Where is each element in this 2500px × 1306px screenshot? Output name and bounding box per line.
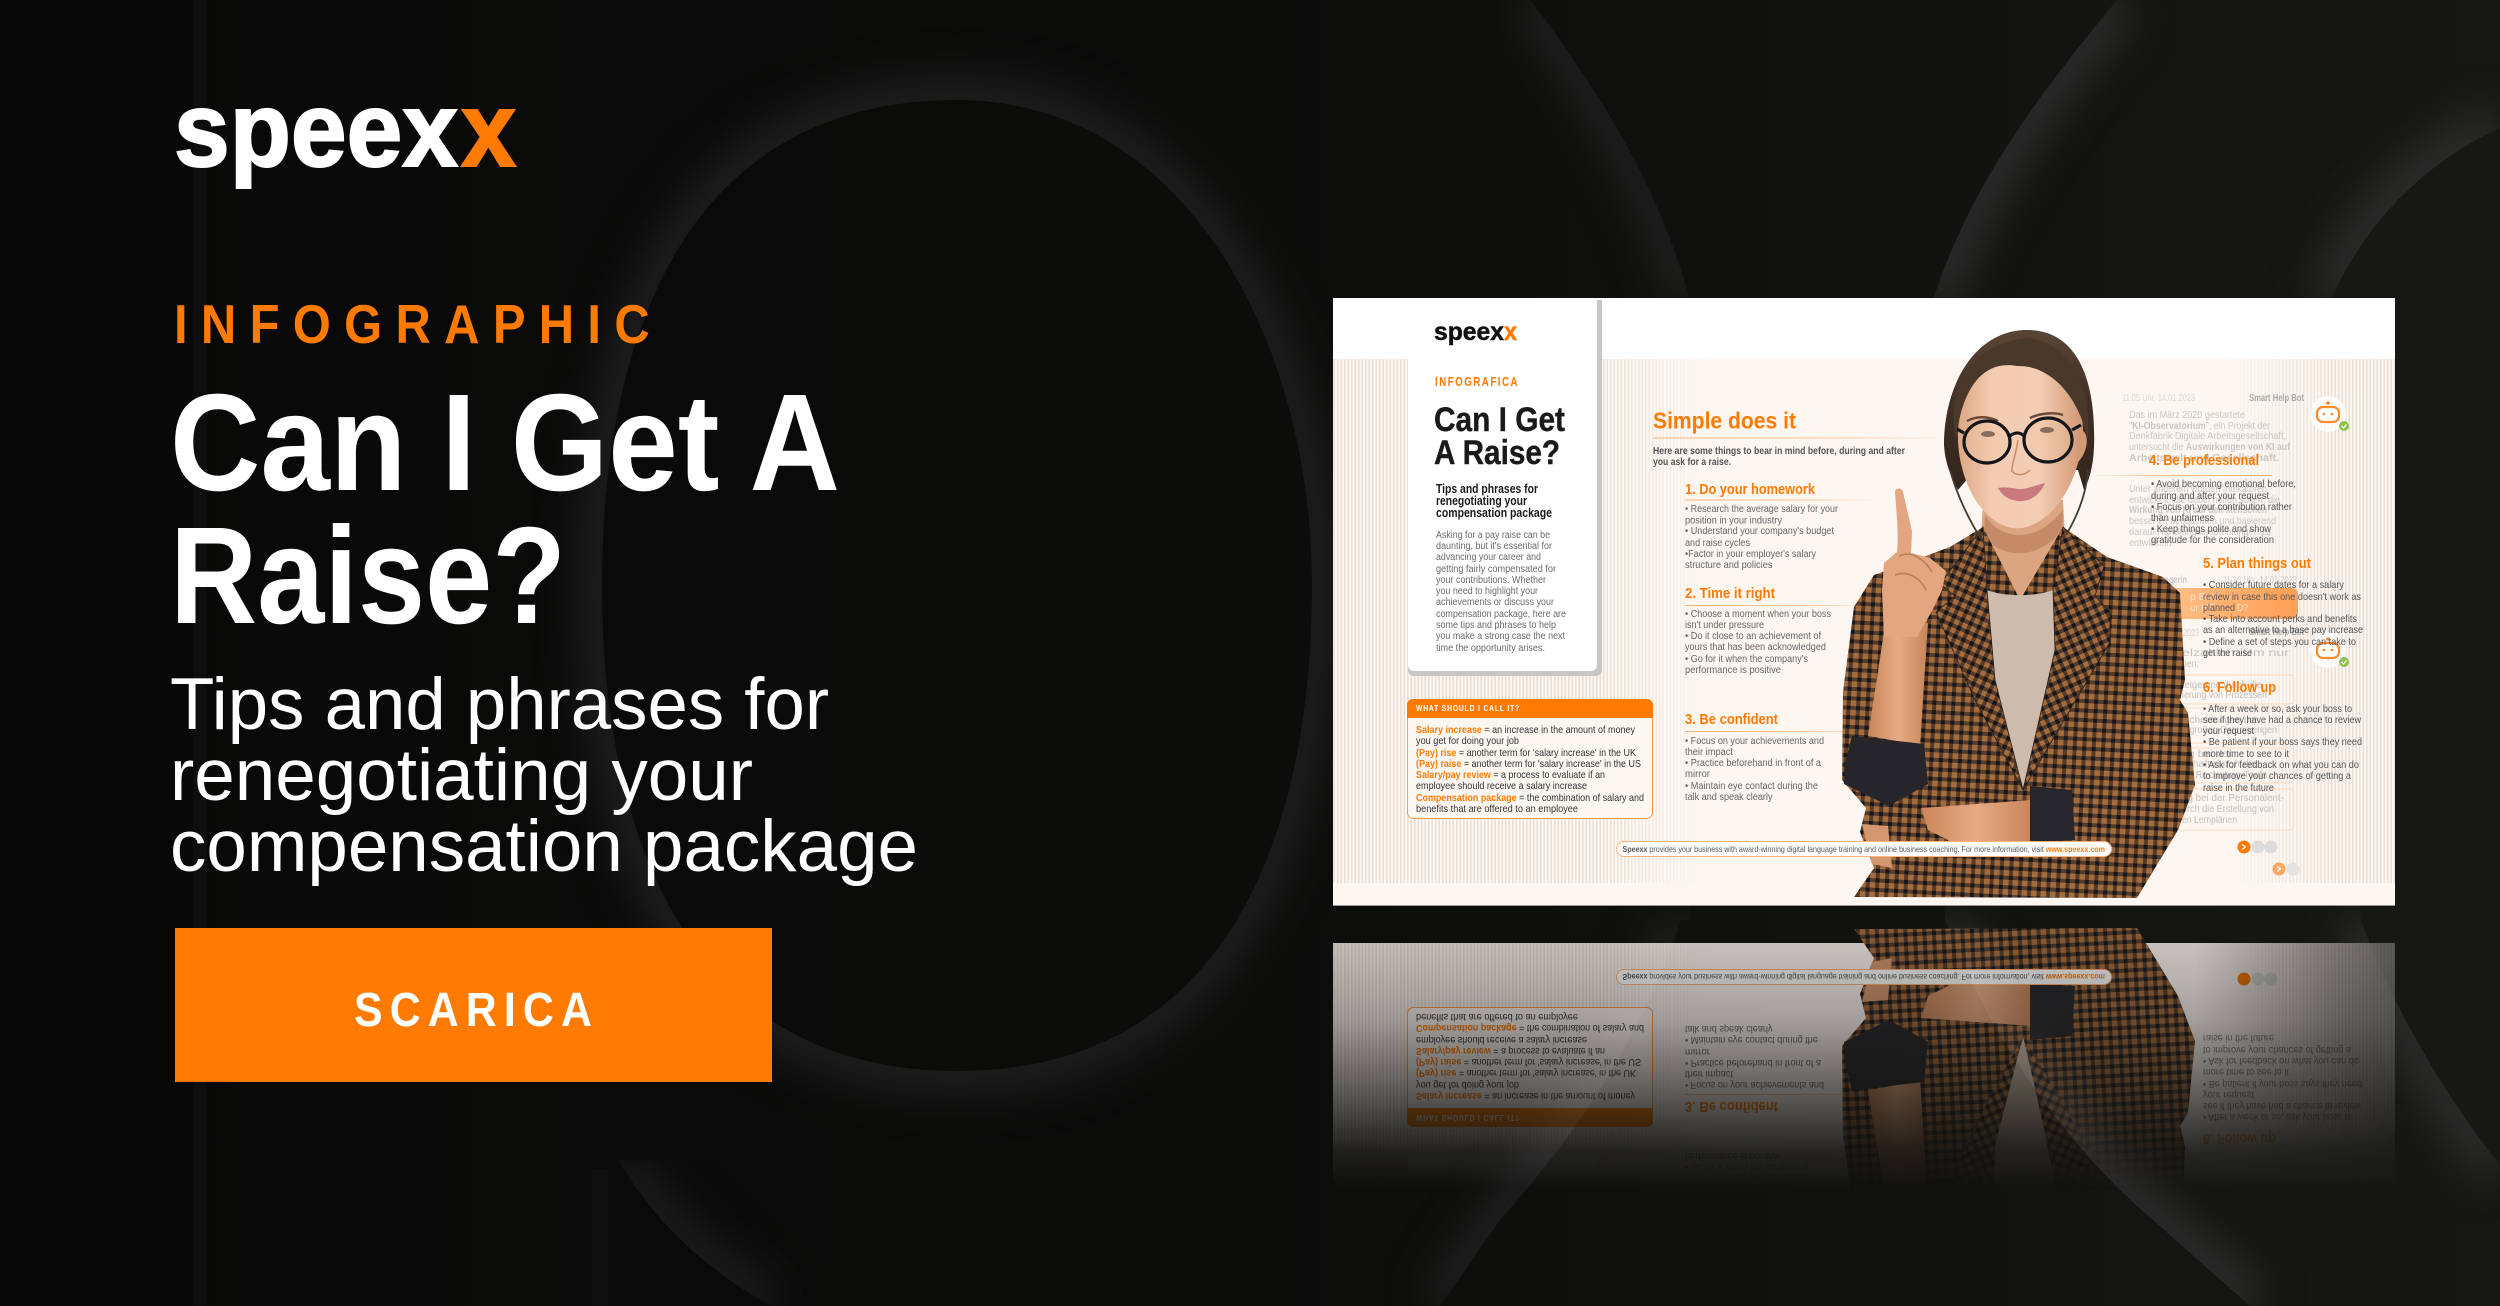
left cuff [1844,736,1928,806]
tip 5: plan things out: review in case this one doesn't work as [2203,592,2361,603]
ghosted chatbot layer: untersucht die Auswirkungen von KI auf [2129,442,2290,453]
ghosted chatbot layer: entwickeln. [2129,538,2174,549]
tip 6: follow up: your request [2203,726,2254,737]
glossary box: what should I call it: you get for doing your job [1416,736,1519,747]
reflected tip 6: see if they have had a chance to review [2203,1100,2361,1111]
reflected glossary box: Compensation package = the combination of salary and [1416,1022,1644,1033]
card intro paragraph: you make a strong case the next [1436,631,1565,642]
card subtitle: compensation package [1436,506,1552,520]
ghosted chatbot layer: p Bot [2190,592,2214,603]
tip 4: be professional: gratitude for the consideration [2151,535,2274,546]
card title: Can I Get [1434,401,1565,439]
tip 4: be professional: than unfairness [2151,513,2214,524]
ghosted chatbot layer: 11:05 Uhr, 14.01.2023 [2122,393,2195,404]
tip 4: be professional: • Keep things polite and show [2151,524,2271,535]
ghosted chatbot layer: 11:10 Uhr, 14.01.2023 [2223,575,2297,586]
ghosted chatbot layer: nen: [2182,659,2199,670]
tip 4: be professional: 4. Be professional [2149,452,2259,469]
reflected tip 6 [2203,1032,2362,1147]
glossary box: what should I call it: Salary increase = an increase in the amount of money [1416,725,1636,736]
ghosted chatbot layer: Arbeitswelt und Gesellschaft. [2129,453,2279,464]
tip 2: time it right: • Choose a moment when your boss [1685,609,1831,620]
neck [1960,500,2085,600]
main title: Raise? [170,499,566,653]
subtitle: renegotiating your [170,735,753,816]
tip 1: do your homework: structure and policies [1685,560,1772,571]
tip 5: plan things out: • Consider future dates for a salary [2203,580,2345,591]
left lapel [1936,527,2023,790]
neck shadow [1984,510,2063,553]
right lapel [2023,527,2110,790]
blazer body [1842,527,2195,898]
footer pill [1616,842,2112,856]
glossary box: what should I call it: (Pay) raise = another term for 'salary increase' in the US [1416,759,1641,770]
raised forearm [1868,623,1928,745]
ghosted chatbot layer: Smart Help Bot [2249,393,2304,404]
ghosted chatbot layer: ierung von Prozessen [2182,690,2267,701]
reflected tip 6: 6. Follow up [2203,1130,2276,1147]
tip 1: do your homework: • Research the average salary for your [1685,504,1839,515]
glasses [1957,418,2081,463]
tip 3: be confident: talk and speak clearly [1685,792,1772,803]
tip 3: be confident: • Maintain eye contact during the [1685,781,1818,792]
reflected glossary box [1407,1008,1653,1127]
tip 6: follow up: 6. Follow up [2203,679,2276,696]
reflected glossary box: you get for doing your job [1416,1079,1519,1090]
tip 3: be confident: • Focus on your achievements and [1685,736,1824,747]
card subtitle: renegotiating your [1436,494,1527,508]
card title [1434,401,1565,472]
tip 6: follow up: see if they have had a chance to review [2203,715,2361,726]
face [1958,363,2083,528]
reflected tips 2 and 3: • Go for it when the company's [1685,1161,1808,1172]
tip 1: do your homework [1685,482,1875,571]
tip 1: do your homework: position in your industry [1685,516,1782,526]
ghosted chatbot layer: ur HF [2190,603,2214,614]
crossed forearm [1921,800,2032,846]
tip 5: plan things out: as an alternative to a base pay increase [2203,625,2363,636]
card subtitle: Tips and phrases for [1436,482,1538,496]
ghosted chatbot layer: en Lernplänen [2182,815,2237,826]
reflected glossary box: employee should receive a salary increase [1416,1034,1587,1045]
tip 5: plan things out: • Take into account perks and benefits [2203,614,2357,625]
right cuff [2030,786,2075,842]
subtitle: Tips and phrases for [170,664,829,745]
reflected tip 6: more time to see to it [2203,1066,2289,1077]
card intro paragraph: your contributions. Whether [1436,575,1547,586]
poster background [1333,298,2395,906]
footer pill: Speexx provides your business with award-winning digital language training and online business coaching. For more information, visit www.speexx.com [1622,844,2105,854]
card intro paragraph: some tips and phrases to help [1436,620,1556,631]
reflected tips 2 and 3: • Practice beforehand in front of a [1685,1057,1821,1068]
reflected tip 6: • Ask for feedback on what you can do [2203,1055,2359,1066]
card subtitle [1436,482,1552,520]
speexx logo: speex [174,71,458,189]
tip 6: follow up: • After a week or so, ask your boss to [2203,704,2352,715]
tip 4: be professional: during and after your request [2151,491,2269,502]
stray hair [1950,470,2088,545]
ghosted chatbot layer: Managerin [2150,575,2187,586]
ghosted chatbot layer: Smart Help Bot [2249,627,2304,638]
ghosted chatbot layer: vo Recruiting-Tools [2182,770,2267,781]
ghosted chatbot layer: "KI-Observatorium", ein Projekt der [2129,421,2270,432]
tip 2: time it right: performance is positive [1685,665,1781,676]
tip 2: time it right: isn't under pressure [1685,620,1764,631]
reflected tip 6: your request [2203,1089,2254,1100]
tip 3: be confident [1685,712,1875,803]
card intro paragraph [1436,530,1566,654]
tip 5: plan things out: • Define a set of steps you can take to [2203,637,2356,648]
card intro paragraph: time the opportunity arises. [1436,643,1545,654]
card title: A Raise? [1434,434,1560,472]
reflected tips 2 and 3: 3. Be confident [1685,1098,1778,1114]
eyes [1981,427,2054,437]
tip 5: plan things out: get the raise [2203,648,2252,659]
infographic poster preview [1333,298,2395,906]
card intro paragraph: daunting, but it's essential for [1436,541,1553,552]
eyebrows [1967,413,2063,421]
ghosted chatbot layer: ng bei der [2182,749,2233,760]
ghosted chatbot layer: n großen Datenmengen [2182,725,2277,736]
reflected footer pill [1616,970,2112,984]
ghosted chatbot layer: elzahlen. Um nur [2182,648,2290,659]
heading: simple does it: you ask for a raise. [1653,457,1731,468]
reflected tips 2 and 3: • Focus on your achievements and [1685,1079,1824,1090]
lips [1998,483,2045,501]
reflected tips 2 and 3 [1685,1024,1842,1165]
card intro paragraph: achievements or discuss your [1436,597,1555,608]
reflected glossary box: Salary/pay review = a process to evaluate if an [1416,1045,1605,1056]
tip 2: time it right: yours that has been acknowledged [1685,642,1826,653]
tip 2: time it right: • Go for it when the company's [1685,654,1808,665]
reflected tips 2 and 3: their impact [1685,1068,1733,1079]
reflected glossary box: Salary increase = an increase in the amount of money [1416,1090,1636,1101]
reflected tip 6: • Be patient if your boss says they need [2203,1078,2362,1089]
eyebrow: INFOGRAPHIC: INFOGRAPHIC [174,293,663,355]
reflected footer pill: Speexx provides your business with award-winning digital language training and online business coaching. For more information, visit www.speexx.com [1622,972,2105,982]
tip 6: follow up: more time to see to it [2203,749,2289,760]
reflected tip 6: • After a week or so, ask your boss to [2203,1111,2352,1122]
reflected glossary box: benefits that are offered to an employee [1416,1011,1578,1022]
tip 6: follow up [2203,679,2362,794]
card logo: speex [1434,318,1504,346]
tip 6: follow up: raise in the future [2203,783,2274,794]
tip 3: be confident: mirror [1685,769,1711,780]
title card [1408,298,1602,676]
glossary box: what should I call it [1407,699,1653,818]
subtitle [170,664,918,887]
reflected tips 2 and 3: • Maintain eye contact during the [1685,1034,1818,1045]
tip 1: do your homework: and raise cycles [1685,538,1750,549]
heading: simple does it: Simple does it [1653,408,1796,434]
reflected glossary box: (Pay) raise = another term for 'salary increase' in the US [1416,1056,1641,1067]
card intro paragraph: compensation package, here are [1436,609,1566,620]
ghosted chatbot layer: D? [2237,603,2248,614]
tip 2: time it right [1685,586,1875,676]
subtitle: compensation package [170,806,918,887]
tip 4: be professional [2090,452,2296,546]
reflected tip 6: raise in the future [2203,1032,2274,1043]
tip 5: plan things out: 5. Plan things out [2203,555,2311,572]
lower hand [1862,824,1892,868]
tip 1: do your homework: 1. Do your homework [1685,482,1816,498]
nose [2012,440,2030,475]
tip 6: follow up: • Be patient if your boss says they need [2203,737,2362,748]
ghosted chatbot layer: Wirkung von KI auf den Menschen [2129,505,2267,516]
ghosted chatbot layer: Denkfabrik Digitale Arbeitsgesellschaft, [2129,431,2286,442]
ear [2076,430,2087,464]
icon: chatbot 1 [2310,396,2349,432]
hand with raised finger [1882,488,1946,637]
tip 4: be professional: • Avoid becoming emotional before, [2151,479,2296,490]
tip 1: do your homework: •Factor in your employer's salary [1685,549,1816,560]
main title [170,366,840,653]
ghosted chatbot layer: besser zu beobachten und basierend [2129,516,2276,527]
reflected card base [1408,1155,1597,1186]
shirt [1987,590,2058,790]
tip 5: plan things out: planned [2203,603,2235,614]
tip 1: do your homework: • Understand your company's budget [1685,526,1834,537]
glossary box: what should I call it: benefits that are offered to an employee [1416,804,1578,815]
tip 3: be confident: 3. Be confident [1685,712,1778,728]
reflected woman [1842,928,2195,1196]
reflected tips 2 and 3: talk and speak clearly [1685,1023,1772,1034]
main title: Can I Get A [170,366,840,520]
ghosted chatbot layer: ng bei der Personalent- [2182,793,2284,804]
reflected tips 2 and 3: performance is positive [1685,1150,1781,1161]
glossary box: what should I call it: employee should receive a salary increase [1416,781,1587,792]
icon: chatbot 2 [2310,632,2349,668]
tip 6: follow up: • Ask for feedback on what you can do [2203,760,2359,771]
glossary box: what should I call it: (Pay) rise = another term for 'salary increase' in the UK [1416,748,1636,759]
tip 6: follow up: to improve your chances of getting a [2203,771,2351,782]
tip 2: time it right: • Do it close to an achievement of [1685,631,1821,642]
tip 3: be confident: • Practice beforehand in front of a [1685,758,1821,769]
card intro paragraph: Asking for a pay raise can be [1436,530,1550,541]
card intro paragraph: getting fairly compensated for [1436,564,1557,575]
ghosted chatbot layer [2122,393,2304,830]
speexx logo: x [461,71,516,189]
ghosted chatbot layer: darauf Handlungsempfehlungen zu [2129,527,2271,538]
hair back [1944,330,2094,490]
reflected background [1333,943,2395,1190]
reflected dots [2238,972,2278,986]
ghosted chatbot layer: Das im März 2020 gestartete [2129,410,2245,421]
reflected glossary box: WHAT SHOULD I CALL IT? [1416,1113,1520,1122]
tip 5: plan things out [2203,555,2363,659]
reflected tip 6: to improve your chances of getting a [2203,1044,2351,1055]
card logo: x [1504,318,1517,346]
heading: simple does it: Here are some things to bear in mind before, during and after [1653,446,1905,457]
heading: simple does it [1653,408,1945,468]
ghosted chatbot layer: teigerung durch die [2182,680,2262,691]
card intro paragraph: advancing your career and [1436,552,1541,563]
card intro paragraph: you need to highlight your [1436,586,1539,597]
tip 2: time it right: 2. Time it right [1685,586,1775,602]
poster reflection [1333,928,2395,1196]
ghosted chatbot layer: entwickelt, die dabei helfen sollen, die [2129,495,2280,506]
reflected tips 2 and 3: mirror [1685,1046,1711,1057]
tip 3: be confident: their impact [1685,747,1733,758]
ghosted chatbot layer: schaft durch die [2182,759,2257,770]
tip 4: be professional: • Focus on your contribution rather [2151,502,2292,513]
ghosted chatbot layer: urch die Erstellung von [2182,804,2274,815]
card eyebrow: INFOGRAFICA [1435,374,1519,389]
download button [175,928,772,1082]
download button: SCARICA [354,984,599,1037]
ghosted chatbot layer: Unter anderem wurden Indikatoren [2129,484,2267,495]
woman illustration [1842,330,2195,898]
ghosted chatbot layer: tscheidungen bei [2182,715,2257,726]
pagination dots [2238,840,2300,876]
glossary box: what should I call it: Salary/pay review = a process to evaluate if an [1416,770,1605,781]
hair front [1953,338,2089,440]
dark background with glowing arcs [574,0,2500,1306]
ghosted chatbot layer: 2023 [2183,628,2199,639]
right-side darkening of reflection [2210,943,2395,1164]
glossary box: what should I call it: Compensation package = the combination of salary and [1416,793,1644,804]
glossary box: what should I call it: WHAT SHOULD I CALL IT? [1416,704,1520,713]
reflected glossary box: (Pay) rise = another term for 'salary increase' in the UK [1416,1067,1636,1078]
